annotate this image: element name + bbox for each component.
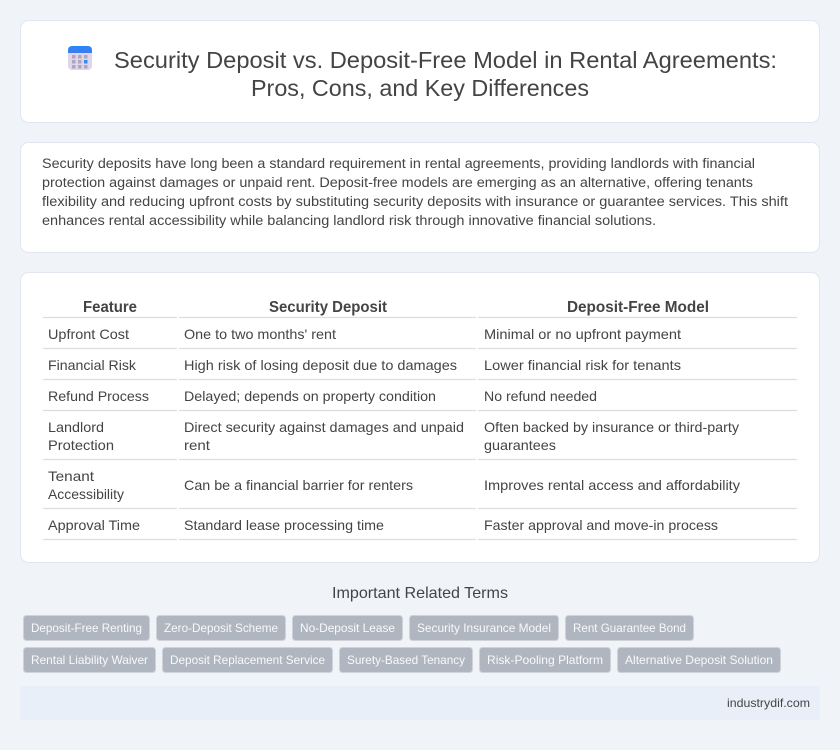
related terms tags: Deposit-Free Renting <box>31 621 142 635</box>
intro text panel: Security deposits have long been a standard requirement in rental agreements, providing landlords with financial <box>42 156 755 172</box>
intro text panel: enhances rental accessibility while balancing landlord risk through innovative financial solutions. <box>42 213 656 229</box>
row: landlord protection: Landlord <box>48 419 104 435</box>
related terms tags: No-Deposit Lease <box>300 621 395 635</box>
related terms tags <box>24 616 780 672</box>
row: financial risk: Financial Risk <box>48 357 137 373</box>
row: tenant accessibility: Accessibility <box>48 486 124 502</box>
row: financial risk: Lower financial risk for tenants <box>484 357 681 373</box>
related terms tags: Zero-Deposit Scheme <box>164 621 278 635</box>
intro text panel: protection against damages or unpaid rent. Deposit-free models are emerging as an alternative, offering tenants <box>42 175 753 191</box>
table header row: Security Deposit <box>269 299 387 316</box>
table header row: Feature <box>83 299 137 316</box>
row: approval time <box>48 517 718 533</box>
header panel <box>20 20 820 122</box>
row: landlord protection: Often backed by insurance or third-party <box>484 419 739 435</box>
table header row: Deposit-Free Model <box>567 299 709 316</box>
intro text panel <box>20 142 820 252</box>
row: refund process: Delayed; depends on property condition <box>184 388 436 404</box>
row: approval time: Approval Time <box>48 517 140 533</box>
intro text panel: flexibility and reducing upfront costs by substituting security deposits with insurance or guarantee services. This shift <box>42 194 788 210</box>
row: landlord protection: guarantees <box>484 437 556 453</box>
title: Security Deposit vs. Deposit-Free Model in Rental Agreements: <box>114 47 777 73</box>
related terms heading: Important Related Terms <box>332 585 508 602</box>
row: refund process: Refund Process <box>48 388 149 404</box>
row: landlord protection: Protection <box>48 437 114 453</box>
title: Pros, Cons, and Key Differences <box>251 75 589 101</box>
related terms tags: Deposit Replacement Service <box>170 653 325 667</box>
row: approval time: Standard lease processing time <box>184 517 384 533</box>
table header row <box>83 299 709 316</box>
row: tenant accessibility: Improves rental access and affordability <box>484 477 740 493</box>
related terms tags: Rental Liability Waiver <box>31 653 148 667</box>
row: upfront cost: Upfront Cost <box>48 326 129 342</box>
row: landlord protection: rent <box>184 437 210 453</box>
row: landlord protection <box>48 419 739 453</box>
row: refund process <box>48 388 597 404</box>
icon: calendar <box>68 46 92 70</box>
footer bar: industrydif.com <box>727 696 810 710</box>
row: approval time: Faster approval and move-in process <box>484 517 718 533</box>
row: upfront cost <box>48 326 681 342</box>
row: landlord protection: Direct security against damages and unpaid <box>184 419 464 435</box>
row: upfront cost: Minimal or no upfront payment <box>484 326 681 342</box>
related terms tags: Alternative Deposit Solution <box>625 653 773 667</box>
related terms tags: Surety-Based Tenancy <box>347 653 465 667</box>
row: tenant accessibility: Can be a financial barrier for renters <box>184 477 413 493</box>
comparison table panel <box>20 272 820 562</box>
row: refund process: No refund needed <box>484 388 597 404</box>
row: financial risk <box>48 357 681 373</box>
related terms tags: Security Insurance Model <box>417 621 551 635</box>
title <box>114 47 777 101</box>
footer bar <box>20 686 820 720</box>
row: upfront cost: One to two months' rent <box>184 326 336 342</box>
related terms tags: Risk-Pooling Platform <box>487 653 603 667</box>
related terms tags: Rent Guarantee Bond <box>573 621 686 635</box>
row: financial risk: High risk of losing deposit due to damages <box>184 357 457 373</box>
row: tenant accessibility: Tenant <box>48 468 94 484</box>
row: tenant accessibility <box>48 468 740 502</box>
